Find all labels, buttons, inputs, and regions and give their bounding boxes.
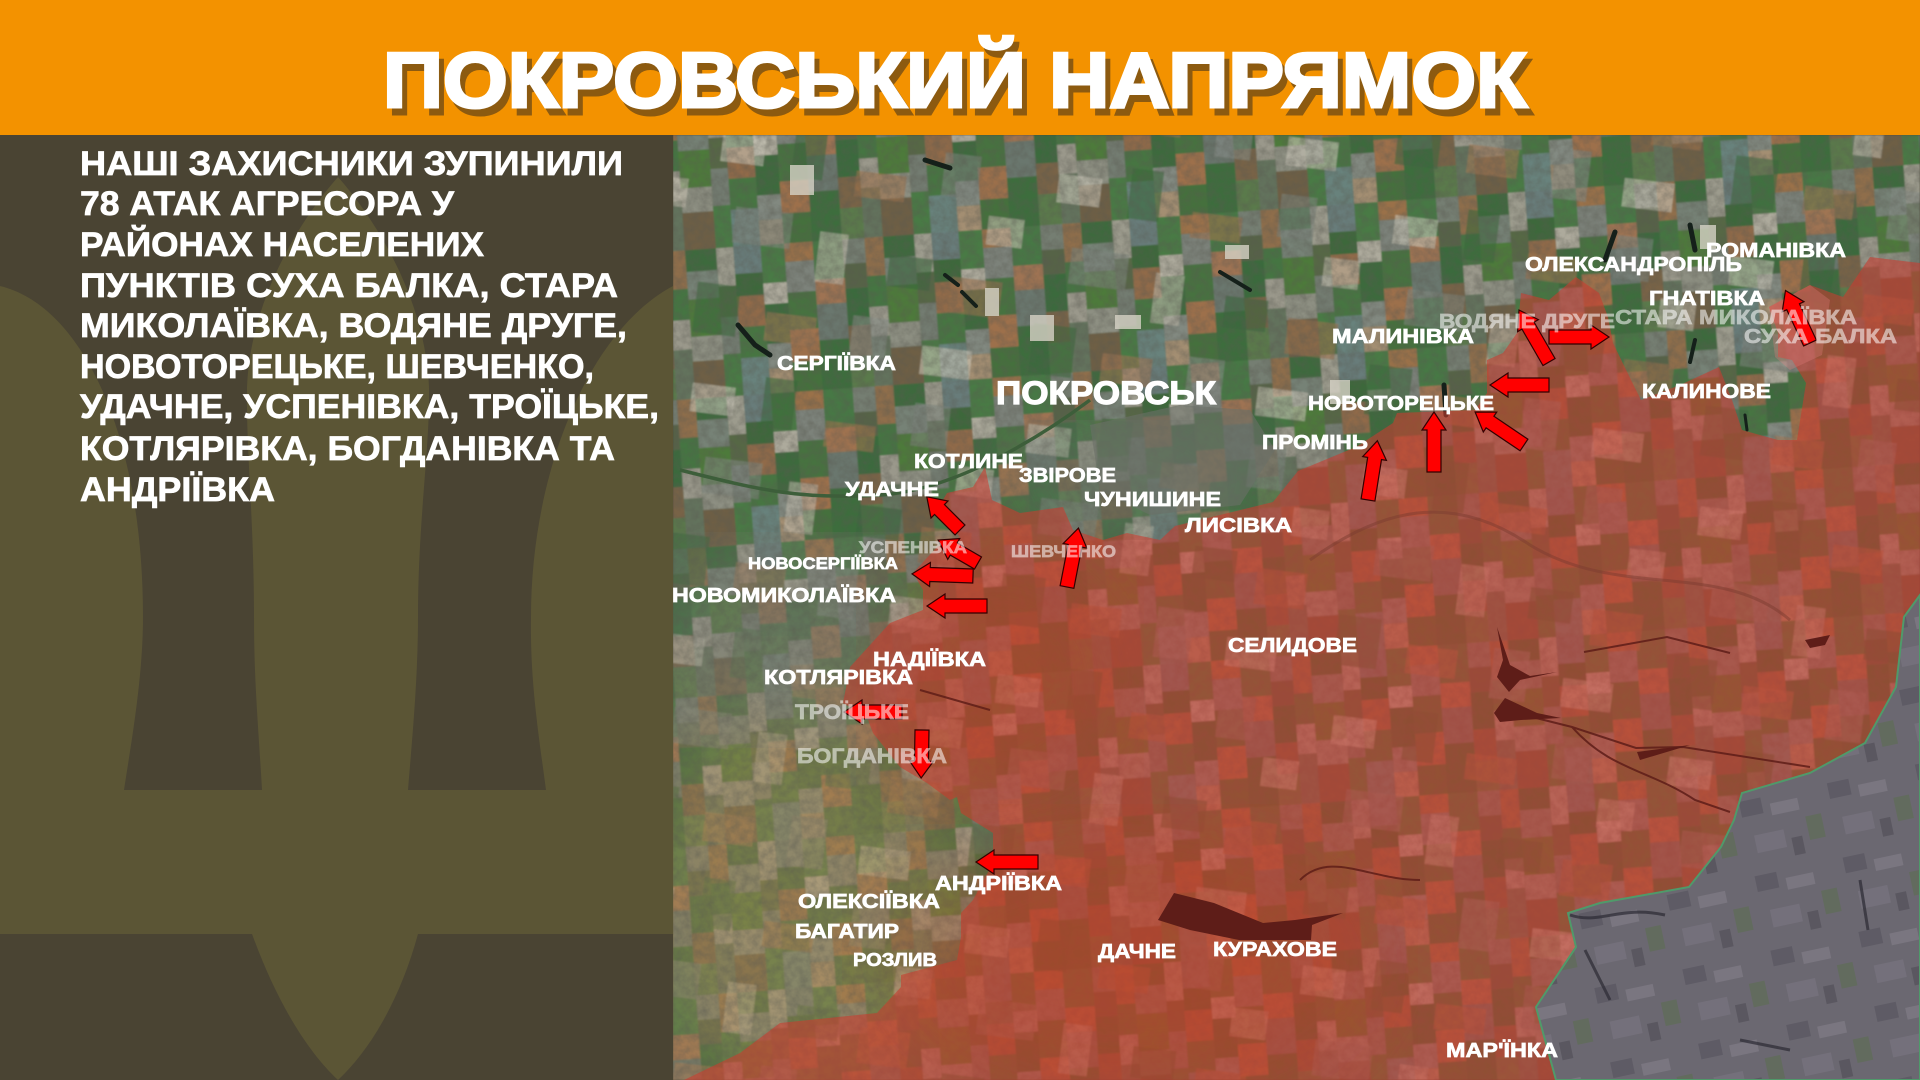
text block: attacks summary: НАШІ ЗАХИСНИКИ ЗУПИНИЛИ: [80, 145, 623, 183]
label: Троїцьке: ТРОЇЦЬКЕ: [795, 701, 909, 724]
label: Дачне: ДАЧНЕ: [1098, 941, 1176, 963]
label: Багатир: БАГАТИР: [795, 921, 899, 943]
label: Котлярівка: КОТЛЯРІВКА: [764, 667, 913, 689]
arrow: Новомиколаївка: [927, 594, 987, 618]
label: Калинове: КАЛИНОВЕ: [1642, 381, 1771, 403]
Donetsk urban area: [1536, 595, 1920, 1080]
label: Котлине: КОТЛИНЕ: [914, 451, 1023, 473]
label: Богданівка: БОГДАНІВКА: [797, 745, 947, 768]
text block: attacks summary: НОВОТОРЕЦЬКЕ, ШЕВЧЕНКО,: [80, 348, 594, 386]
label: Суха Балка: СУХА БАЛКА: [1744, 326, 1897, 348]
arrow: Богданівка: [909, 730, 934, 778]
arrow: Успенівка: [937, 538, 982, 570]
arc road red zone: [1310, 512, 1790, 620]
label: Новомиколаївка: НОВОМИКОЛАЇВКА: [672, 584, 896, 607]
arrow: Новоторецьке east: [1490, 373, 1549, 397]
text block: attacks summary: ПУНКТІВ СУХА БАЛКА, СТАРА: [80, 267, 618, 305]
reservoirs and streams: [738, 160, 1747, 430]
label: Романівка: РОМАНІВКА: [1706, 240, 1846, 262]
label: Удачне: УДАЧНЕ: [845, 479, 939, 501]
text block: attacks summary: РАЙОНАХ НАСЕЛЕНИХ: [80, 225, 484, 264]
label: Розлив: РОЗЛИВ: [853, 950, 937, 970]
occupied territory overlay: [684, 257, 1920, 1080]
arrow: Проміння: [1360, 440, 1388, 502]
label: Чунишине: ЧУНИШИНЕ: [1084, 489, 1221, 511]
attack arrows: [844, 285, 1821, 874]
arrow: Стара Миколаївка east: [1549, 325, 1609, 349]
arrow: Троїцьке: [844, 700, 902, 724]
label: Промінь: ПРОМІНЬ: [1262, 432, 1368, 454]
arrow: Водяне Друге north-west: [1516, 309, 1556, 366]
arrow: Андріївка: [976, 850, 1038, 874]
label: Сергіївка: СЕРГІЇВКА: [777, 352, 896, 375]
text block: attacks summary: [80, 145, 659, 509]
label: Олексіївка: ОЛЕКСІЇВКА: [798, 890, 940, 913]
arrow: Новосергіївка: [912, 562, 973, 588]
header bar: [0, 0, 1920, 135]
Kurakhove reservoir and ponds: [1158, 627, 1830, 940]
arrow: Новоторецьке south-east: [1474, 411, 1529, 452]
arrow: Шевченко: [1060, 527, 1088, 589]
arrow: Новоторецьке south: [1422, 412, 1446, 472]
road: [680, 400, 1090, 496]
ravines: [920, 637, 1810, 880]
panel: left text panel: [0, 135, 673, 1080]
text block: attacks summary: 78 АТАК АГРЕСОРА У: [80, 185, 455, 223]
text block: attacks summary: УДАЧНЕ, УСПЕНІВКА, ТРОЇЦЬКЕ,: [80, 388, 659, 426]
label: Шевченко: ШЕВЧЕНКО: [1011, 542, 1116, 561]
label: Водяне Друге: ВОДЯНЕ ДРУГЕ: [1439, 311, 1615, 333]
settlement labels: [672, 240, 1897, 1062]
satellite field base: [630, 135, 1920, 1080]
label: Андріївка: АНДРІЇВКА: [935, 872, 1062, 895]
map panel: [630, 135, 1920, 1080]
label: Стара Миколаївка: СТАРА МИКОЛАЇВКА: [1615, 306, 1857, 329]
light fields north: [790, 165, 1716, 404]
settlement: Pokrovsk: [1090, 405, 1275, 515]
pink contested area: [1769, 285, 1830, 370]
title: ПОКРОВСЬКИЙ НАПРЯМОК: [383, 36, 1527, 124]
label: Малинівка: МАЛИНІВКА: [1332, 326, 1474, 348]
title: ПОКРОВСЬКИЙ НАПРЯМОК: [388, 43, 1532, 131]
text block: attacks summary: АНДРІЇВКА: [80, 471, 275, 509]
label: Лисівка: ЛИСІВКА: [1185, 515, 1292, 537]
icon: trident emblem watermark: [0, 177, 673, 1080]
arrow: Удачне: [926, 496, 966, 536]
label: Гнатівка: ГНАТІВКА: [1649, 288, 1765, 310]
label: Успенівка: УСПЕНІВКА: [859, 538, 967, 557]
label: Новоторецьке: НОВОТОРЕЦЬКЕ: [1308, 393, 1494, 415]
label: Селидове: СЕЛИДОВЕ: [1228, 635, 1357, 657]
label: Курахове: КУРАХОВЕ: [1213, 939, 1337, 961]
text block: attacks summary: МИКОЛАЇВКА, ВОДЯНЕ ДРУГЕ,: [80, 307, 627, 345]
label: Новосергіївка: НОВОСЕРГІЇВКА: [748, 554, 898, 573]
label: Надіївка: НАДІЇВКА: [873, 648, 986, 671]
text block: attacks summary: КОТЛЯРІВКА, БОГДАНІВКА ТА: [80, 430, 615, 468]
label: Олександропіль: ОЛЕКСАНДРОПІЛЬ: [1525, 254, 1742, 276]
red zone tint: [880, 560, 1370, 1080]
label: Мар'їнка: МАР'ЇНКА: [1446, 1039, 1558, 1062]
arrow: Суха Балка: [1782, 290, 1817, 347]
label: Звірове: ЗВІРОВЕ: [1019, 465, 1116, 487]
label: Покровськ: ПОКРОВСЬК: [996, 375, 1217, 411]
